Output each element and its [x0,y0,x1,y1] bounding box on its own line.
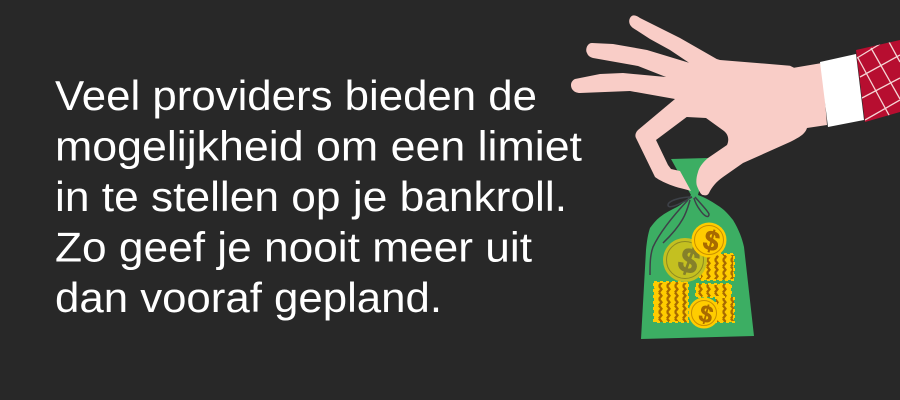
icon: money bag [641,158,754,339]
text block: Veel providers bieden de [55,72,537,119]
gold coin top: $ [700,224,723,258]
string tie [650,197,709,275]
text block: dan vooraf gepland. [55,274,442,321]
shirt sleeve [856,40,900,122]
text block: in te stellen op je bankroll. [55,173,567,220]
dim coin [663,238,707,283]
gold coin bottom [688,298,720,330]
gold coin top [692,222,726,258]
shirt cuff [820,54,864,127]
dim coin: $ [673,240,705,283]
bag body [641,158,754,339]
coin stacks [654,254,734,322]
gold coin bottom: $ [696,300,717,330]
text block: mogelijkheid om een limiet [55,122,582,170]
icon: hand [571,15,827,195]
infographic canvas [55,15,900,339]
text block: Zo geef je nooit meer uit [55,224,532,270]
text block [55,72,582,321]
